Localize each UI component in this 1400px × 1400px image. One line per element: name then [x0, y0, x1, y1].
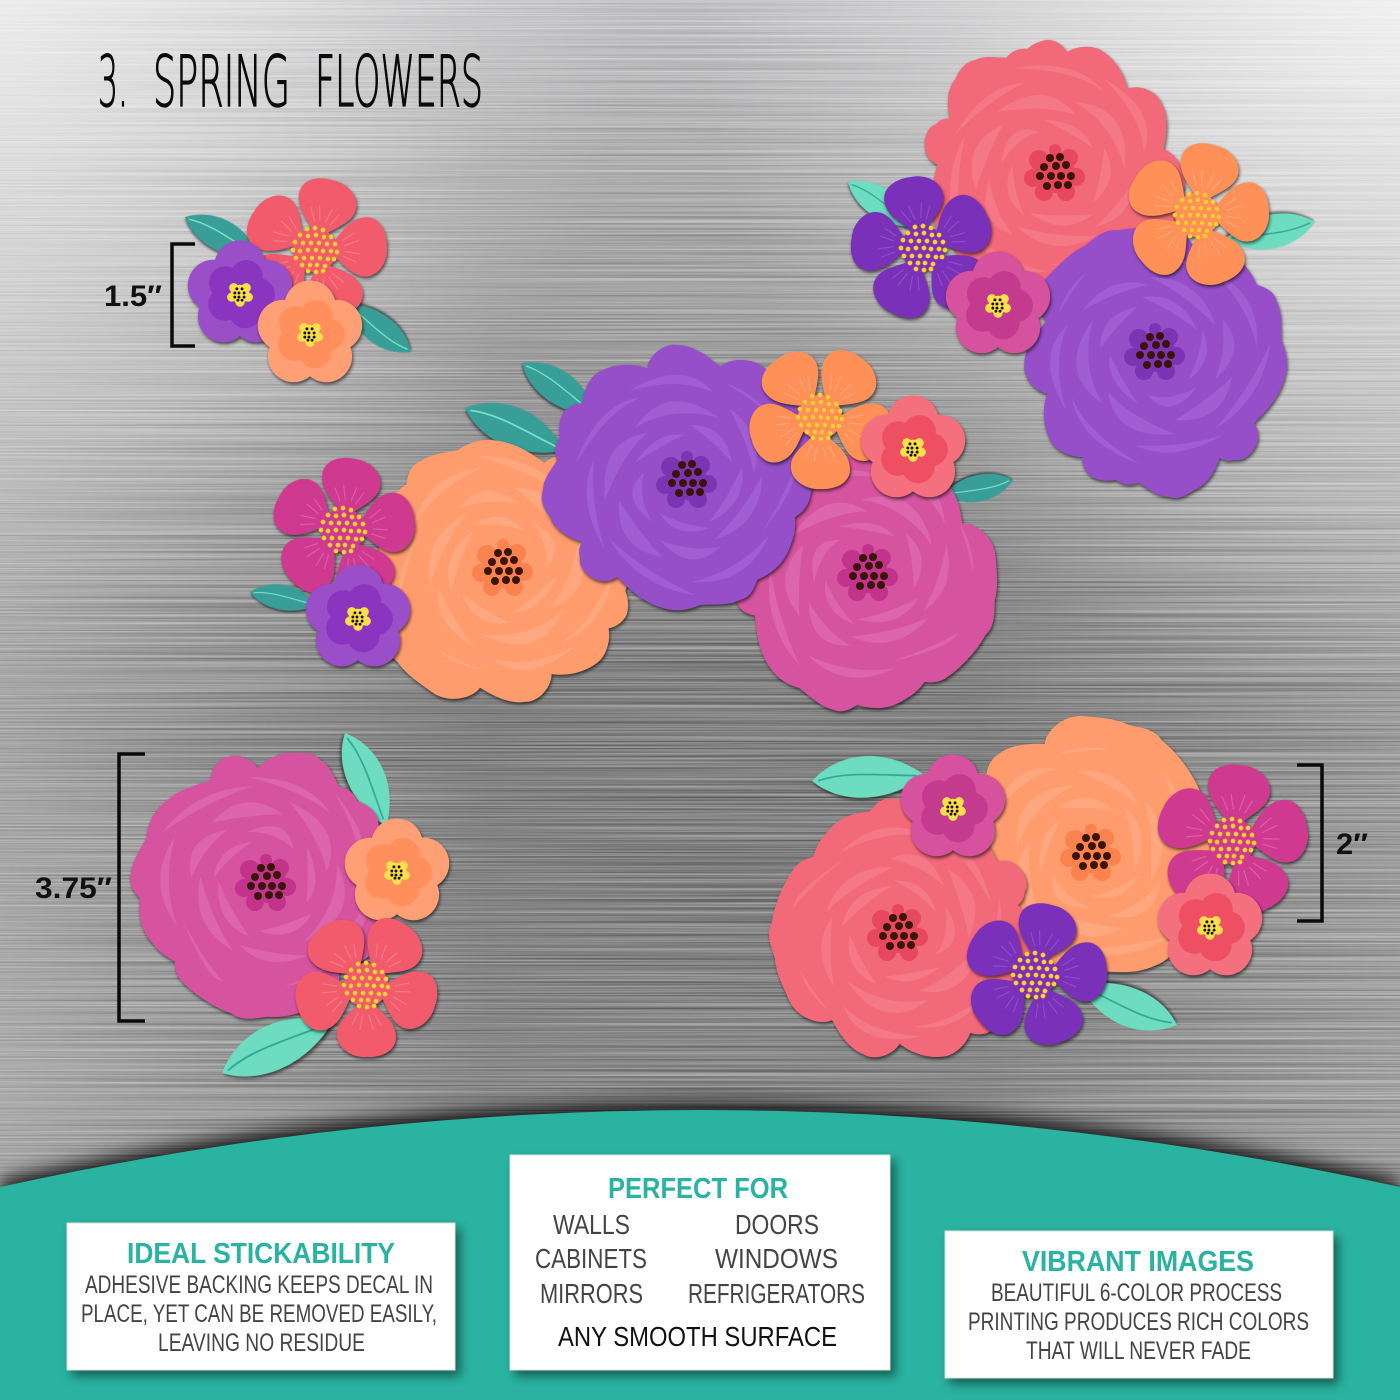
purple petal flower [940, 885, 1129, 1068]
pink round flower [946, 251, 1050, 353]
leaf: top left lower [458, 389, 573, 467]
leaf: right [1222, 206, 1318, 257]
pink rose [678, 396, 1046, 763]
sticker group: center cluster [248, 313, 1046, 763]
leaf: upper left [178, 202, 268, 270]
card: vibrant images: BEAUTIFUL 6-COLOR PROCESS [991, 1279, 1282, 1307]
coral petal flower [258, 881, 471, 1092]
card: ideal stickability: PLACE, YET CAN BE REMOVED EASILY, [81, 1300, 437, 1328]
title [98, 41, 483, 123]
card: vibrant images: VIBRANT IMAGES [1022, 1246, 1254, 1278]
card: ideal stickability: ADHESIVE BACKING KEEPS DECAL IN [85, 1271, 433, 1299]
leaf: bottom right [1072, 969, 1184, 1044]
leaf: top left upper [513, 349, 606, 427]
orange rose [345, 417, 659, 726]
dimension: 2 inch: 2″ [1336, 828, 1368, 861]
title: 3. [98, 41, 128, 123]
leaf: left [840, 169, 923, 238]
coral rose [873, 0, 1228, 347]
leaf: bottom [212, 1000, 341, 1092]
sticker group: bottom left cluster [86, 700, 471, 1092]
coral round flower [1158, 873, 1262, 975]
sticker group: bottom right cluster [738, 666, 1324, 1100]
orange petal flower [1102, 125, 1291, 308]
leaf: lower left [248, 579, 319, 616]
sticker group: top right cluster [834, 0, 1318, 498]
dimension: 3.75 inch: 3.75″ [35, 872, 112, 905]
pink round flower [901, 754, 1005, 856]
coral petal flower [220, 160, 409, 343]
orange round flower [345, 818, 449, 920]
title: SPRING [153, 41, 290, 123]
card: perfect for: WINDOWS [715, 1243, 838, 1274]
card: perfect for: ANY SMOOTH SURFACE [558, 1321, 837, 1352]
card: ideal stickability: LEAVING NO RESIDUE [158, 1329, 365, 1357]
purple rose [542, 345, 814, 610]
card: ideal stickability: IDEAL STICKABILITY [127, 1238, 395, 1270]
coral round flower [861, 395, 965, 497]
pink petal flower [1139, 754, 1324, 932]
leaf: top [329, 725, 405, 833]
card: perfect for: MIRRORS [540, 1278, 643, 1309]
card: perfect for: CABINETS [535, 1243, 647, 1274]
leaf: right [940, 468, 1016, 509]
card: perfect for: DOORS [735, 1209, 819, 1240]
card: perfect for: REFRIGERATORS [688, 1278, 865, 1309]
sticker group: small 1.5 inch cluster [178, 160, 419, 382]
dimension: 1.5 inch: 1.5″ [104, 280, 162, 313]
leaf: left [811, 753, 926, 800]
purple round flower [188, 240, 292, 342]
card: perfect for: WALLS [553, 1209, 630, 1240]
text: FLOWERS [315, 41, 483, 123]
pink rose [86, 700, 445, 1062]
purple petal flower [834, 163, 1013, 336]
dimension: 1.5 inch [104, 244, 195, 346]
card: perfect for: PERFECT FOR [608, 1173, 788, 1205]
purple round flower [306, 564, 410, 666]
orange petal flower [712, 313, 925, 524]
coral rose [738, 765, 1078, 1100]
card: vibrant images: THAT WILL NEVER FADE [1026, 1337, 1251, 1365]
card: vibrant images [945, 1231, 1333, 1378]
card: ideal stickability [67, 1223, 455, 1370]
purple rose [1024, 228, 1287, 498]
dimension: 3.75 inch [35, 754, 145, 1021]
pink petal flower [253, 445, 432, 618]
leaf: lower right [338, 293, 419, 365]
dimension: 2 inch [1297, 765, 1368, 921]
teal curved footer band [0, 1110, 1400, 1400]
orange rose [894, 666, 1273, 1045]
orange round flower [258, 280, 362, 382]
card: perfect for [510, 1155, 890, 1370]
